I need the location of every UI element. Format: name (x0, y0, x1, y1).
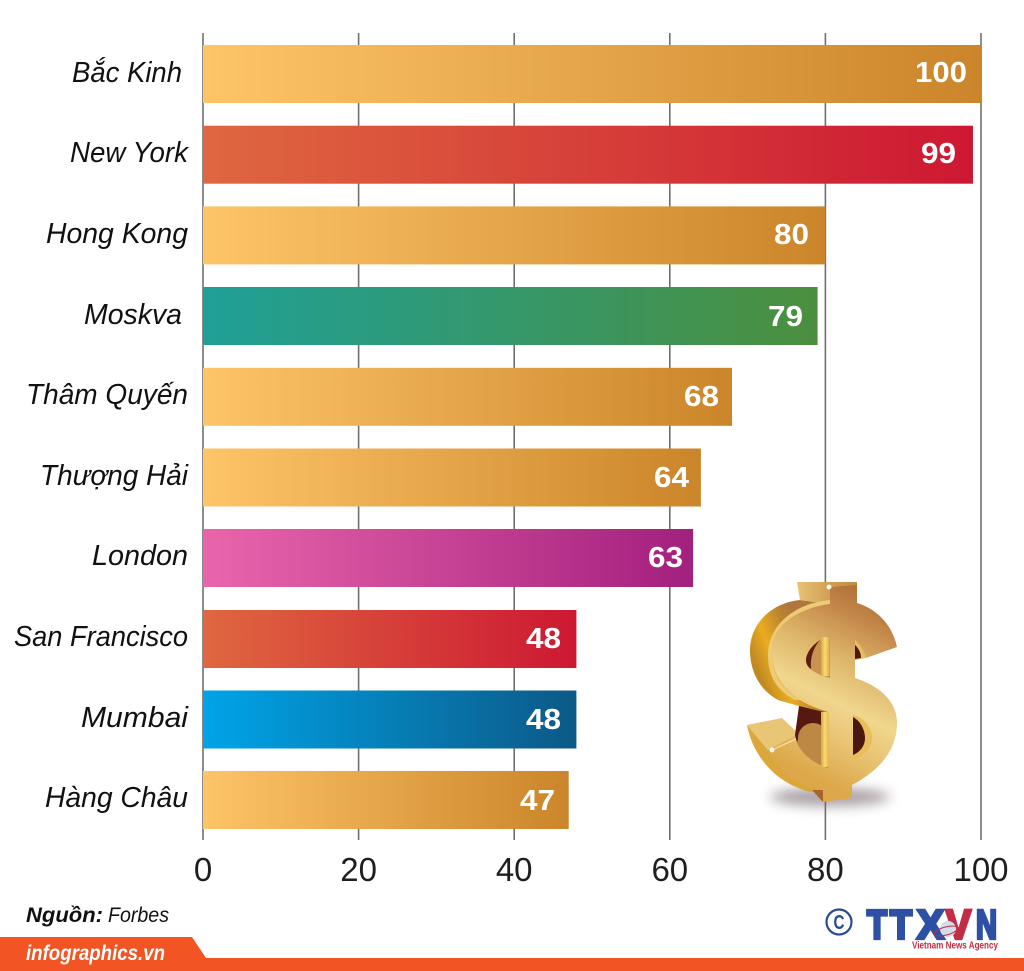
bar: Hong Kong (46, 206, 825, 264)
bar: Mumbai (81, 690, 576, 748)
bar: Bắc Kinh: Bắc Kinh (72, 56, 182, 89)
bar: Hong Kong: 80 (774, 219, 809, 251)
x axis labels: 60 (651, 851, 688, 888)
x axis labels: 80 (807, 851, 844, 888)
bar: Thượng Hải (40, 448, 701, 506)
x axis labels: 100 (953, 851, 1009, 888)
bar: Moskva (84, 287, 818, 345)
bar: Mumbai: Mumbai (81, 702, 190, 734)
x axis labels: 40 (496, 851, 533, 888)
bar: New York (70, 126, 973, 184)
footer ribbon: infographics.vn (26, 942, 165, 965)
bar: Hàng Châu (45, 771, 569, 829)
bar: Mumbai: 48 (526, 704, 561, 736)
bar: San Francisco: 48 (526, 623, 561, 655)
logo: TTXVN: X (917, 902, 944, 948)
bar: Bắc Kinh (72, 45, 981, 103)
bar: Moskva: 79 (768, 301, 803, 333)
axis grid lines (203, 33, 981, 840)
icon: gold dollar sign (747, 582, 897, 806)
bar: Hàng Châu: Hàng Châu (45, 782, 188, 814)
bar: Thâm Quyến: 68 (684, 381, 719, 413)
bar: New York: New York (70, 137, 189, 169)
logo: TTXVN: C (834, 912, 844, 934)
bar: Thâm Quyến: Thâm Quyến (26, 379, 188, 411)
x axis labels (194, 851, 1009, 888)
logo: TTXVN: T (890, 902, 912, 948)
source note: Nguồn: (26, 904, 103, 927)
bar: San Francisco: San Francisco (14, 621, 188, 653)
footer ribbon (0, 937, 1024, 971)
bar: Thượng Hải: Thượng Hải (40, 460, 189, 492)
logo: TTXVN: Vietnam News Agency (912, 940, 998, 952)
bar chart (14, 45, 981, 829)
bar: Moskva: Moskva (84, 299, 182, 331)
logo: TTXVN: N (976, 902, 997, 948)
bar: London: London (92, 540, 188, 572)
bar: New York: 99 (921, 138, 956, 170)
x axis labels: 20 (340, 851, 377, 888)
bar: Thượng Hải: 64 (654, 462, 689, 494)
logo: TTXVN: V (946, 902, 972, 948)
x axis labels: 0 (194, 851, 212, 888)
bar: Thâm Quyến (26, 368, 732, 426)
source note: Forbes (108, 904, 169, 927)
bar: London (92, 529, 693, 587)
bar: London: 63 (648, 542, 683, 574)
bar: Hàng Châu: 47 (520, 785, 555, 817)
source note (26, 904, 169, 927)
logo: TTXVN (826, 902, 998, 952)
bar: San Francisco (14, 610, 576, 668)
logo: TTXVN: T (867, 902, 887, 948)
bar: Bắc Kinh: 100 (915, 57, 967, 89)
bar: Hong Kong: Hong Kong (46, 218, 188, 250)
